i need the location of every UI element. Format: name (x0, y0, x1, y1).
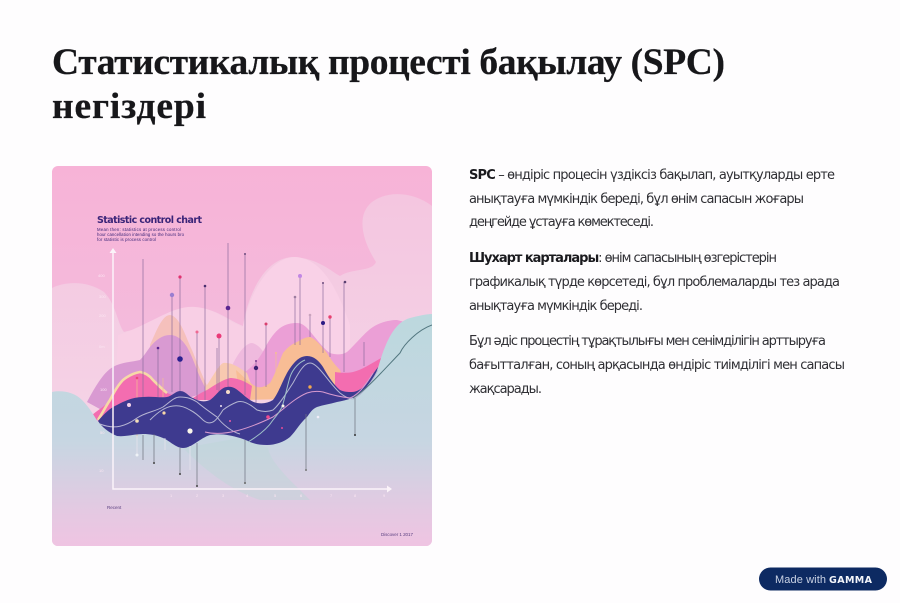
paragraph: SPC (469, 168, 835, 230)
paragraph: method goal (469, 334, 845, 397)
paragraph: method goal: бағытталған, соның арқасында өндіріс тиімділігі мен сапасы (469, 358, 845, 373)
paragraph: method goal: Бұл әдіс процестің тұрақтылығы мен сенімділігін арттыруға (469, 334, 826, 349)
pink-purple hills (87, 320, 402, 409)
peach hills (205, 337, 350, 400)
chart heading: for statistic is process control (97, 237, 156, 242)
teal mounds (52, 314, 432, 546)
axis tick labels: 4 (246, 493, 249, 498)
navy band (98, 356, 378, 448)
chart heading: hour cancellation intending so the hours bro (97, 232, 185, 237)
paragraph: Shewhart charts (469, 251, 840, 314)
cream ribbon (98, 372, 167, 420)
badge: Made with Gamma (759, 568, 887, 590)
badge: Made with Gamma: GAMMA (829, 575, 873, 586)
axis tick labels: 2 (196, 493, 199, 498)
chart heading: Statistic control chart (97, 215, 202, 226)
chart footer labels: Recent (107, 505, 122, 510)
pale clouds (52, 194, 432, 420)
hot pink band (93, 358, 381, 420)
axis tick labels: 400 (98, 273, 105, 278)
axis tick labels: 300 (99, 294, 106, 299)
paragraph: SPC: SPC – өндіріс процесін үздіксіз бақылап, ауытқуларды ерте (469, 168, 835, 183)
axis tick labels: 5 (274, 493, 277, 498)
shaded teal overlap (198, 460, 310, 500)
body text block (469, 168, 845, 397)
axis tick labels (98, 273, 386, 498)
data points (127, 253, 356, 487)
chart illustration panel (52, 166, 432, 546)
axis tick labels: 8 (354, 493, 357, 498)
axis tick labels: 3 (222, 493, 225, 498)
chart footer labels (107, 505, 413, 537)
axis tick labels: 9 (383, 493, 386, 498)
axis tick labels: 100 (100, 387, 107, 392)
axis tick labels: 6 (300, 493, 303, 498)
paragraph: SPC: деңгейде ұстауға көмектеседі. (469, 215, 654, 230)
paragraph: SPC: анықтауға мүмкіндік береді, бұл өнім сапасын жоғары (469, 192, 804, 207)
paragraph: Shewhart charts: Шухарт карталары: өнім сапасының өзгерістерін (469, 251, 777, 266)
title: негіздері (52, 86, 206, 127)
lilac back hill (232, 343, 263, 372)
chart footer labels: Discover 1 2017 (381, 532, 413, 537)
lower data stems (137, 398, 355, 486)
axis tick labels: 1 (170, 493, 173, 498)
axis tick labels: 7 (330, 493, 333, 498)
axis tick labels: 10 (99, 468, 104, 473)
title (52, 42, 725, 127)
salmon hill (150, 315, 207, 388)
axes (110, 248, 392, 492)
paragraph: Shewhart charts: графикалық түрде көрсетеді, бұл проблемаларды тез арада (469, 275, 840, 290)
axis tick labels: 50 (100, 430, 105, 435)
paragraph: Shewhart charts: анықтауға мүмкіндік береді. (469, 299, 643, 314)
axis tick labels: 200 (99, 313, 106, 318)
paragraph: method goal: жақсарады. (469, 382, 542, 397)
badge: Made with Gamma: Made with (775, 574, 826, 586)
chart heading (97, 215, 202, 242)
upper data stems (137, 243, 364, 438)
chart heading: Mean then: statistics at process control (97, 227, 181, 232)
axis tick labels: 0m (99, 344, 105, 349)
title: Статистикалық процесті бақылау (SPC) (52, 42, 725, 83)
control limit curves (100, 325, 432, 442)
